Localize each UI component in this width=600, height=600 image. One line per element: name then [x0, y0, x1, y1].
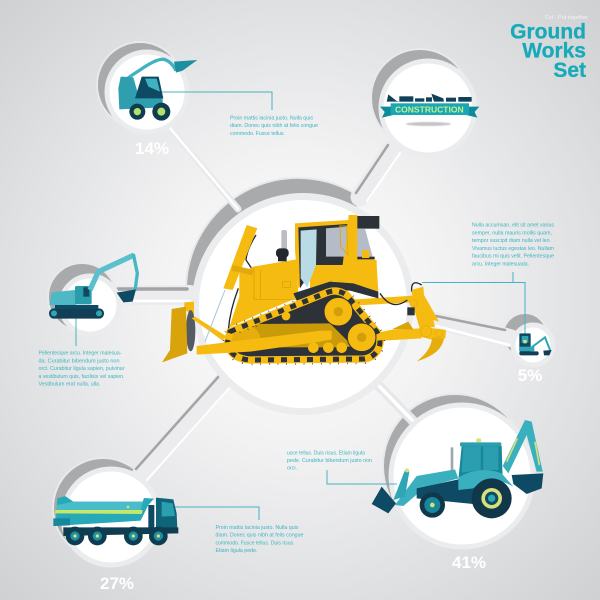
- text: mini excavator note: Nulla accumsan, elit sit amet varius: [472, 223, 555, 229]
- chassis: [417, 479, 483, 505]
- text: mini excavator note: Vivamus luctus egestas leo. Nullam: [472, 246, 554, 252]
- icon: excavator: [49, 254, 137, 319]
- text: skid steer note: Proin mattis lacinia justo. Nulla quis: [230, 116, 314, 122]
- text: truck note: [216, 525, 304, 554]
- body panels: [254, 267, 297, 299]
- text: backhoe note: usce tellus. Duis risus. Etiam ligula: [287, 450, 365, 456]
- hydraulic cylinder: [223, 225, 257, 290]
- percentage labels: 14%: [135, 139, 169, 158]
- cab: [458, 446, 503, 480]
- text: excavator note: Vestibulum erat nulla, ulla.: [38, 382, 100, 388]
- text: mini excavator note: tempor suscipit diam nulla vel leo.: [472, 238, 551, 244]
- icon: construction banner: [380, 94, 479, 126]
- title: Ground: [510, 20, 586, 44]
- icon: dump truck: [53, 496, 178, 545]
- percentage labels: [100, 139, 542, 593]
- undercarriage: [293, 282, 378, 301]
- body: [229, 259, 298, 327]
- icon: backhoe loader: [372, 420, 543, 518]
- machine silhouettes: [387, 94, 472, 102]
- text: truck note: commodo. Fusce tellus. Duis risus.: [216, 540, 294, 546]
- exhaust: [276, 230, 289, 261]
- text: excavator note: orci. Curabitur ligula sapien, pulvinar: [38, 366, 125, 372]
- icon: mini excavator: [519, 333, 552, 355]
- text: backhoe note: pede. Curabitur bibendum justo non: [287, 458, 372, 464]
- text: mini excavator note: semper, nulla mauris mollis quam,: [472, 230, 552, 236]
- icon: skid steer loader: [118, 59, 197, 121]
- text: excavator note: [38, 350, 125, 388]
- title: Set: [553, 59, 586, 82]
- push arm: [197, 331, 332, 355]
- text: truck note: Etiam ligula pede.: [216, 548, 258, 554]
- grey shadow crescents: [48, 42, 547, 558]
- text: skid steer note: diam. Donec quis nibh at felis congue: [230, 123, 318, 129]
- icon: bulldozer: [162, 215, 380, 362]
- crawler track: [227, 291, 380, 360]
- text: backhoe note: [287, 450, 372, 472]
- title: Works: [522, 40, 586, 62]
- text: mini excavator note: [472, 223, 555, 267]
- wheels: [282, 297, 376, 353]
- icon: ripper: [347, 283, 446, 361]
- percentage labels: 5%: [518, 366, 542, 385]
- text: skid steer note: [230, 116, 318, 137]
- wheels: [472, 478, 512, 518]
- text: excavator note: Pellentesque arcu. Integer malesua-: [38, 350, 122, 356]
- hydraulic rod and hoses: [205, 235, 256, 342]
- text: skid steer note: commodo. Fusce tellus.: [230, 131, 285, 137]
- leader lines: [76, 92, 525, 520]
- text: backhoe note: orci.: [287, 466, 297, 472]
- title: [510, 15, 588, 82]
- title: Cut - Put together: [545, 15, 588, 21]
- connector lines: [118, 128, 513, 480]
- text: excavator note: da. Curabitur bibendum justo non: [38, 358, 120, 364]
- percentage labels: 27%: [100, 574, 134, 593]
- cab: [295, 215, 379, 292]
- loader arm: [395, 469, 458, 506]
- text: truck note: Proin mattis lacinia justo. Nulla quis: [216, 525, 299, 531]
- text: mini excavator note: arcu. Integer malesuada.: [472, 261, 529, 267]
- white circles: [61, 52, 553, 565]
- text: excavator note: a vestibulum quis, facilisis vel sapien.: [38, 374, 124, 380]
- text: mini excavator note: faucibus mi quis velit. Pellentesque: [472, 254, 554, 260]
- percentage labels: 41%: [452, 553, 486, 572]
- rear arm: [503, 420, 543, 473]
- blade: [162, 302, 226, 362]
- text: truck note: diam. Donec quis nibh at felis congue: [216, 533, 304, 539]
- ribbon: CONSTRUCTION: [395, 104, 464, 114]
